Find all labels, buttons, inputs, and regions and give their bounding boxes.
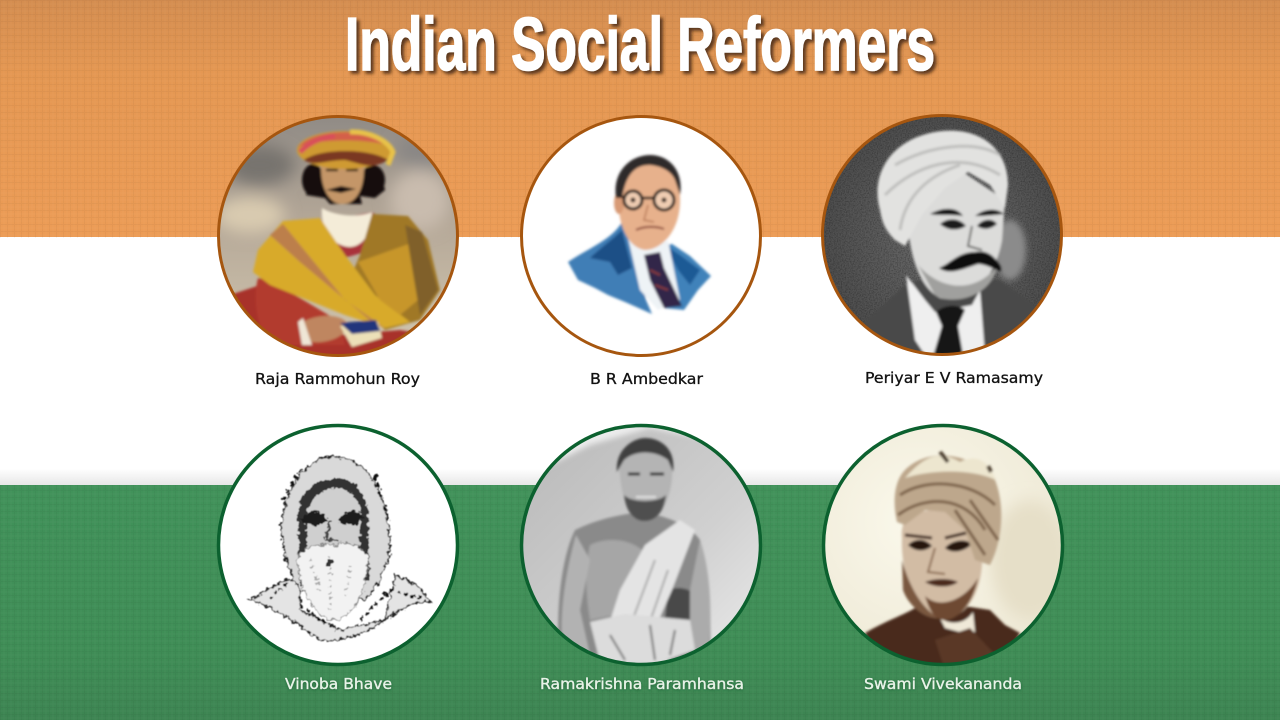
portrait: B R Ambedkar — [522, 116, 760, 356]
portrait: Swami Vivekananda — [822, 424, 1070, 670]
green band — [0, 485, 1280, 720]
label: Periyar E V Ramasamy: Periyar E V Ramasamy — [865, 369, 1043, 387]
white band — [0, 237, 1280, 486]
saffron band — [0, 0, 1280, 238]
portrait: Ramakrishna Paramhansa — [520, 424, 764, 668]
label: Vinoba Bhave: Vinoba Bhave — [285, 675, 392, 693]
portrait: Vinoba Bhave — [218, 426, 458, 664]
label: Raja Rammohun Roy: Raja Rammohun Roy — [255, 370, 420, 388]
label: Ramakrishna Paramhansa: Ramakrishna Paramhansa — [540, 675, 744, 693]
label: B R Ambedkar: B R Ambedkar — [590, 370, 704, 388]
portrait: Raja Rammohun Roy — [215, 113, 461, 359]
portrait: Periyar E V Ramasamy — [820, 113, 1066, 360]
label: Swami Vivekananda: Swami Vivekananda — [864, 675, 1022, 693]
title: Indian Social Reformers — [345, 2, 935, 86]
